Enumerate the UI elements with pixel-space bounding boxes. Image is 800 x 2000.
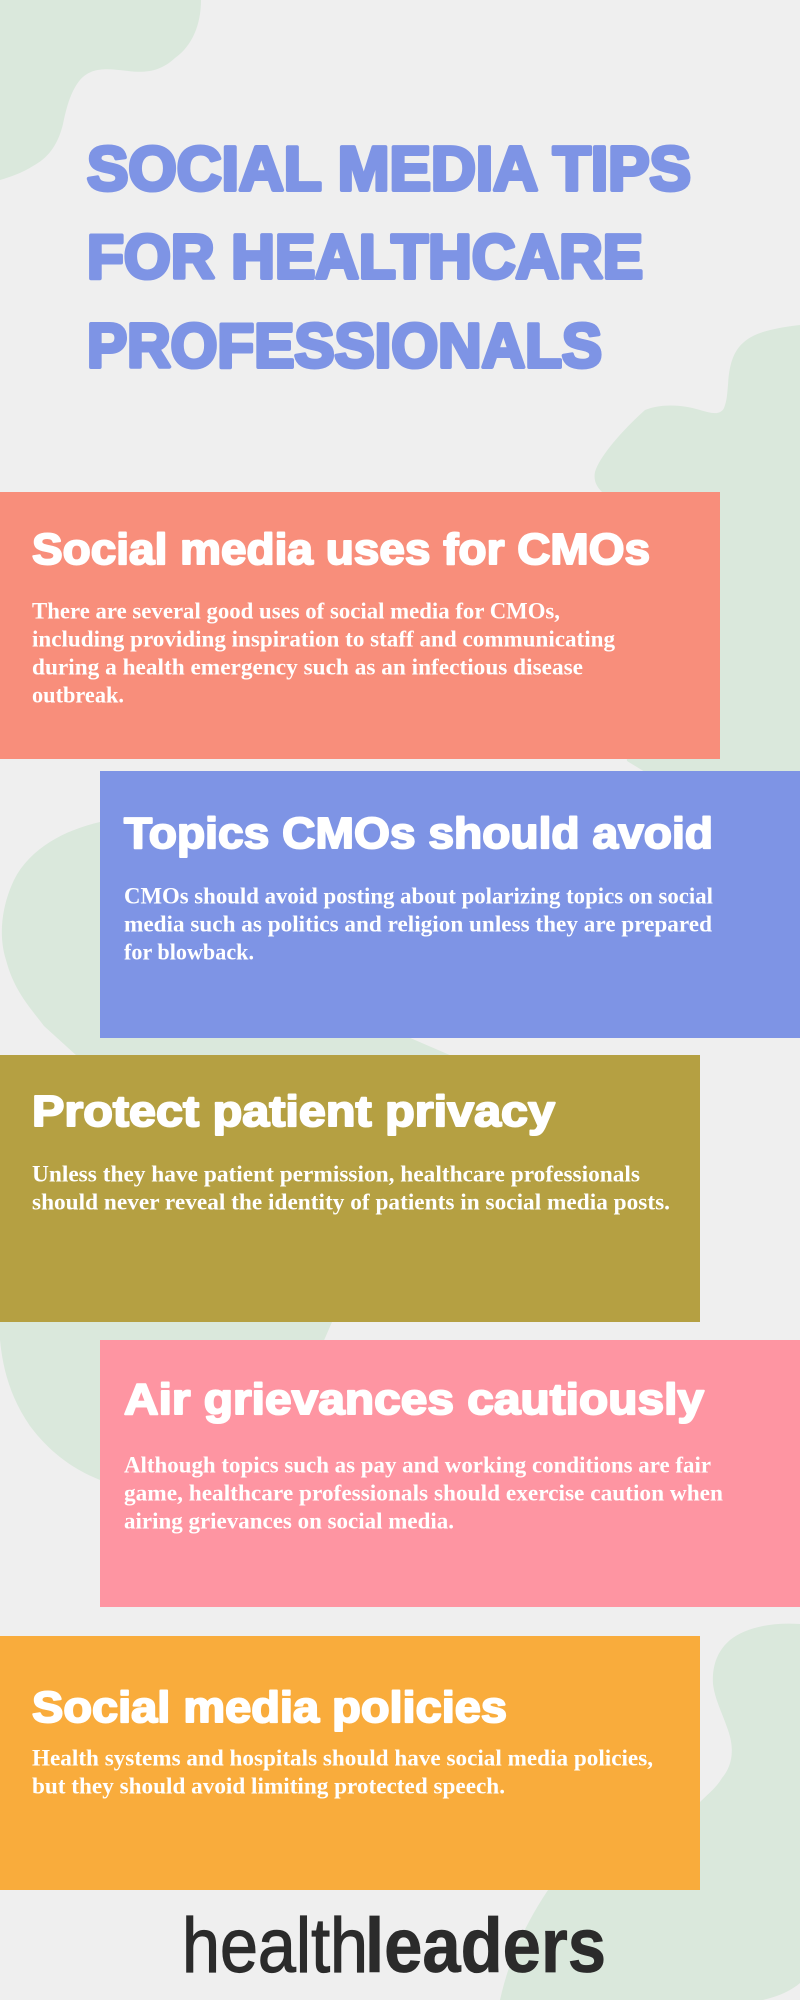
logo: healthleaders: leaders: [365, 1903, 606, 1989]
text: uses: [32, 598, 615, 708]
text: grievances: [124, 1452, 723, 1534]
text: policies: Health systems and hospitals should have social media policies,: [32, 1746, 653, 1770]
panel: protect patient privacy: [0, 1055, 700, 1322]
heading: uses: Social media uses for CMOs: [32, 525, 650, 574]
heading: grievances: Air grievances cautiously: [124, 1375, 705, 1424]
text: topics: media such as politics and religion unless they are prepared: [124, 912, 712, 936]
title: PROFESSIONALS: [87, 312, 602, 381]
text: policies: but they should avoid limiting protected speech.: [32, 1774, 505, 1798]
panel: social media uses for CMOs: [0, 492, 720, 759]
text: privacy: Unless they have patient permission, healthcare professionals: [32, 1162, 640, 1186]
text: grievances: Although topics such as pay and working conditions are fair: [124, 1452, 711, 1478]
text: privacy: should never reveal the identity of patients in social media posts.: [32, 1190, 670, 1214]
text: uses: There are several good uses of social media for CMOs,: [32, 598, 560, 624]
text: policies: [32, 1746, 653, 1798]
text: topics: [124, 884, 713, 964]
text: grievances: airing grievances on social media.: [124, 1508, 454, 1534]
panel: social media policies: [0, 1636, 700, 1890]
heading: privacy: Protect patient privacy: [32, 1087, 556, 1136]
title: SOCIAL MEDIA TIPS: [87, 135, 691, 204]
heading: topics: Topics CMOs should avoid: [124, 809, 713, 858]
title: [87, 135, 691, 381]
text: topics: for blowback.: [124, 940, 254, 964]
logo: healthleaders: [182, 1903, 606, 1989]
text: uses: including providing inspiration to staff and communicating: [32, 626, 615, 652]
logo: healthleaders: health: [182, 1903, 368, 1989]
text: uses: during a health emergency such as an infectious disease: [32, 654, 583, 680]
panel: topics CMOs should avoid: [100, 771, 800, 1038]
text: privacy: [32, 1162, 670, 1214]
panel: air grievances cautiously: [100, 1340, 800, 1607]
text: grievances: game, healthcare professionals should exercise caution when: [124, 1480, 723, 1506]
text: topics: CMOs should avoid posting about polarizing topics on social: [124, 884, 713, 908]
title: FOR HEALTHCARE: [87, 223, 643, 292]
heading: policies: Social media policies: [32, 1683, 507, 1732]
text: uses: outbreak.: [32, 682, 124, 708]
